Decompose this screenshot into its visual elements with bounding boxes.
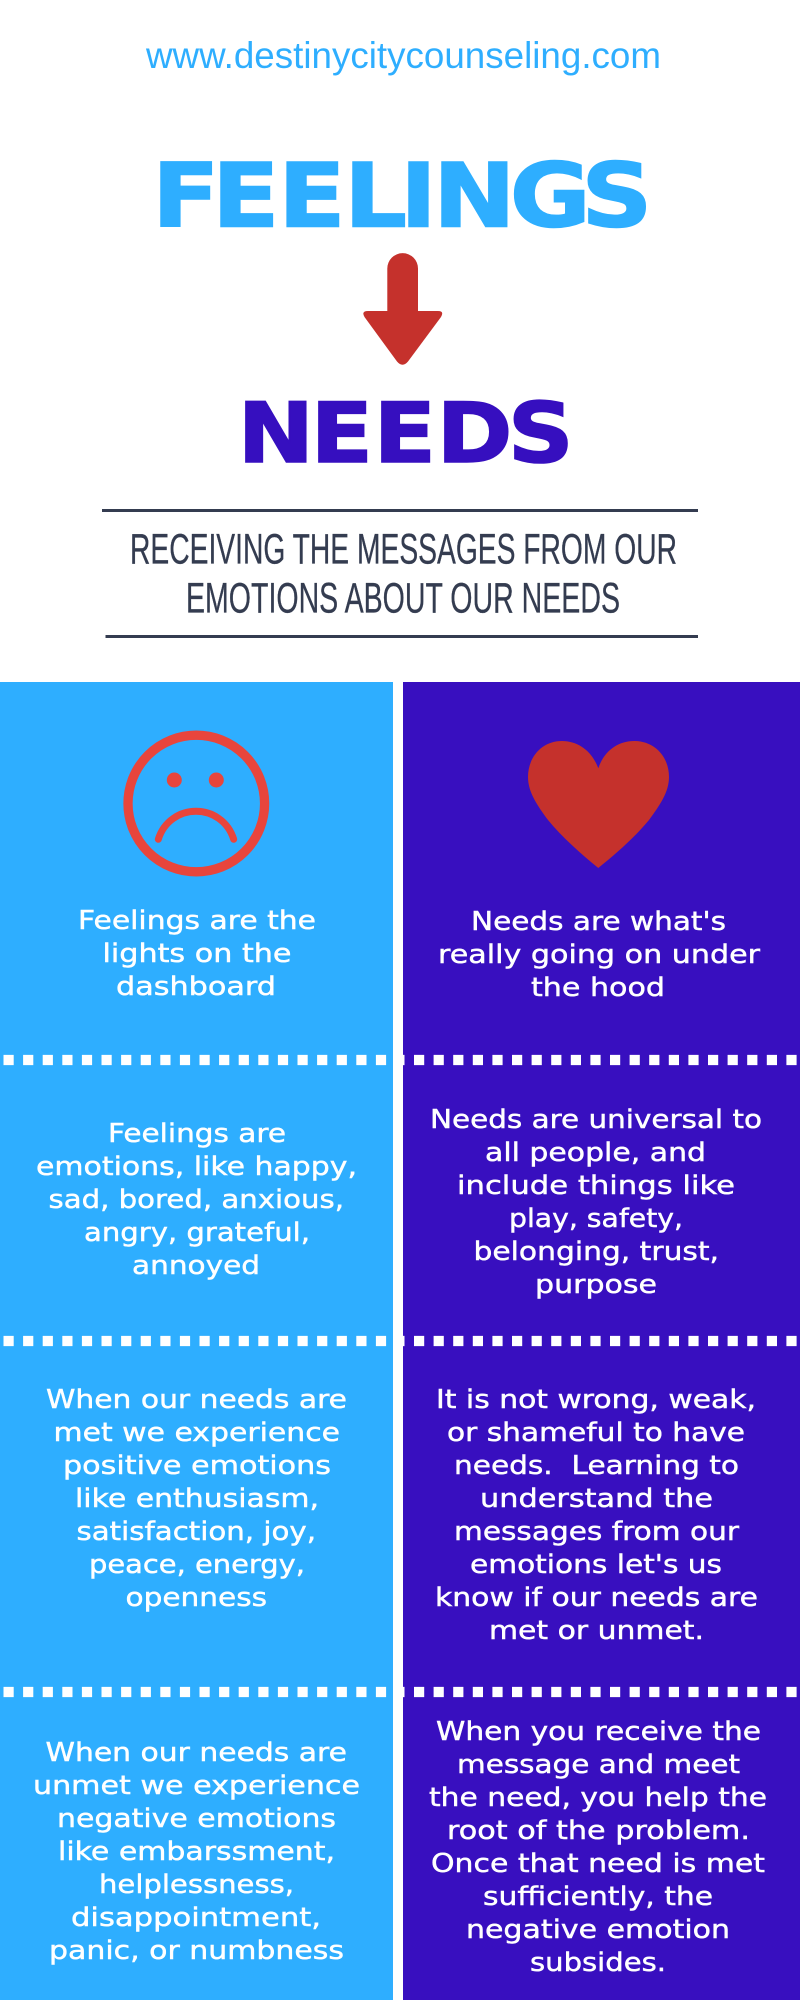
text: feelings are emotions: angry, grateful, <box>84 1218 310 1248</box>
text: not wrong to have needs: know if our needs are <box>435 1583 758 1613</box>
title: feelings: FEELINGS <box>152 145 652 248</box>
text: not wrong to have needs: messages from our <box>454 1517 739 1547</box>
text: needs met: satisfaction, joy, <box>76 1517 316 1547</box>
text: receive the message: the need, you help the <box>429 1783 767 1813</box>
text: receive the message: subsides. <box>530 1948 666 1978</box>
text: needs unmet: unmet we experience <box>33 1771 360 1801</box>
dotted divider row 3 <box>4 1687 800 1697</box>
text: receive the message: Once that need is met <box>431 1849 765 1879</box>
text: needs unmet: When our needs are <box>46 1738 347 1768</box>
text: needs under the hood: the hood <box>531 973 665 1003</box>
text: feelings are emotions <box>36 1119 357 1281</box>
title: needs: NEEDS <box>238 385 574 482</box>
text: receive the message: sufficiently, the <box>483 1882 713 1912</box>
text: receive the message: negative emotion <box>466 1915 730 1945</box>
text: needs met: When our needs are <box>46 1385 347 1415</box>
dotted divider row 2 <box>4 1336 800 1346</box>
text: not wrong to have needs: needs. Learning to <box>454 1451 739 1481</box>
text: not wrong to have needs: It is not wrong, weak, <box>436 1385 756 1415</box>
text: needs met: met we experience <box>54 1418 340 1448</box>
panel: needs column <box>403 682 800 2000</box>
text: feelings dashboard: dashboard <box>116 972 276 1002</box>
dotted divider row 1 <box>4 1055 800 1065</box>
text: needs met <box>46 1385 347 1613</box>
text: needs are universal: belonging, trust, <box>474 1237 719 1267</box>
text: needs unmet: helplessness, <box>99 1870 294 1900</box>
text: needs met: peace, energy, <box>89 1550 305 1580</box>
text: needs are universal: purpose <box>535 1270 657 1300</box>
text: receive the message: message and meet <box>457 1750 740 1780</box>
text: needs are universal: play, safety, <box>509 1204 683 1234</box>
text: needs are universal: Needs are universal to <box>430 1105 762 1135</box>
text: feelings are emotions: emotions, like happy, <box>36 1152 357 1182</box>
panel: feelings column <box>0 682 393 2000</box>
text: feelings dashboard: lights on the <box>102 939 292 969</box>
website url: www.destinycitycounseling.com <box>145 35 661 76</box>
text: receive the message <box>429 1717 767 1978</box>
text: feelings dashboard <box>78 906 316 1002</box>
subtitle with rules <box>102 509 698 638</box>
text: needs unmet: disappointment, <box>71 1903 321 1933</box>
text: not wrong to have needs <box>435 1385 758 1646</box>
text: needs under the hood: Needs are what's <box>471 907 726 937</box>
icon: heart <box>528 741 669 868</box>
text: receive the message: When you receive the <box>436 1717 761 1747</box>
text: needs are universal: all people, and <box>485 1138 706 1168</box>
text: feelings are emotions: Feelings are <box>108 1119 286 1149</box>
text: needs are universal <box>430 1105 762 1300</box>
text: needs are universal: include things like <box>457 1171 735 1201</box>
text: feelings are emotions: sad, bored, anxious, <box>48 1185 344 1215</box>
text: not wrong to have needs: met or unmet. <box>489 1616 704 1646</box>
arrow pointing down <box>363 253 442 365</box>
text: not wrong to have needs: or shameful to have <box>447 1418 745 1448</box>
text: needs under the hood <box>438 907 760 1003</box>
text: not wrong to have needs: emotions let's us <box>470 1550 722 1580</box>
text: needs under the hood: really going on under <box>438 940 760 970</box>
text: feelings dashboard: Feelings are the <box>78 906 316 936</box>
text: needs met: positive emotions <box>63 1451 331 1481</box>
text: needs unmet: like embarssment, <box>58 1837 335 1867</box>
text: needs met: like enthusiasm, <box>75 1484 319 1514</box>
text: receive the message: root of the problem. <box>447 1816 750 1846</box>
icon: sad face <box>128 735 265 872</box>
text: needs met: openness <box>126 1583 267 1613</box>
text: needs unmet <box>33 1738 360 1966</box>
text: not wrong to have needs: understand the <box>480 1484 713 1514</box>
text: needs unmet: negative emotions <box>57 1804 336 1834</box>
text: needs unmet: panic, or numbness <box>49 1936 344 1966</box>
text: feelings are emotions: annoyed <box>132 1251 260 1281</box>
